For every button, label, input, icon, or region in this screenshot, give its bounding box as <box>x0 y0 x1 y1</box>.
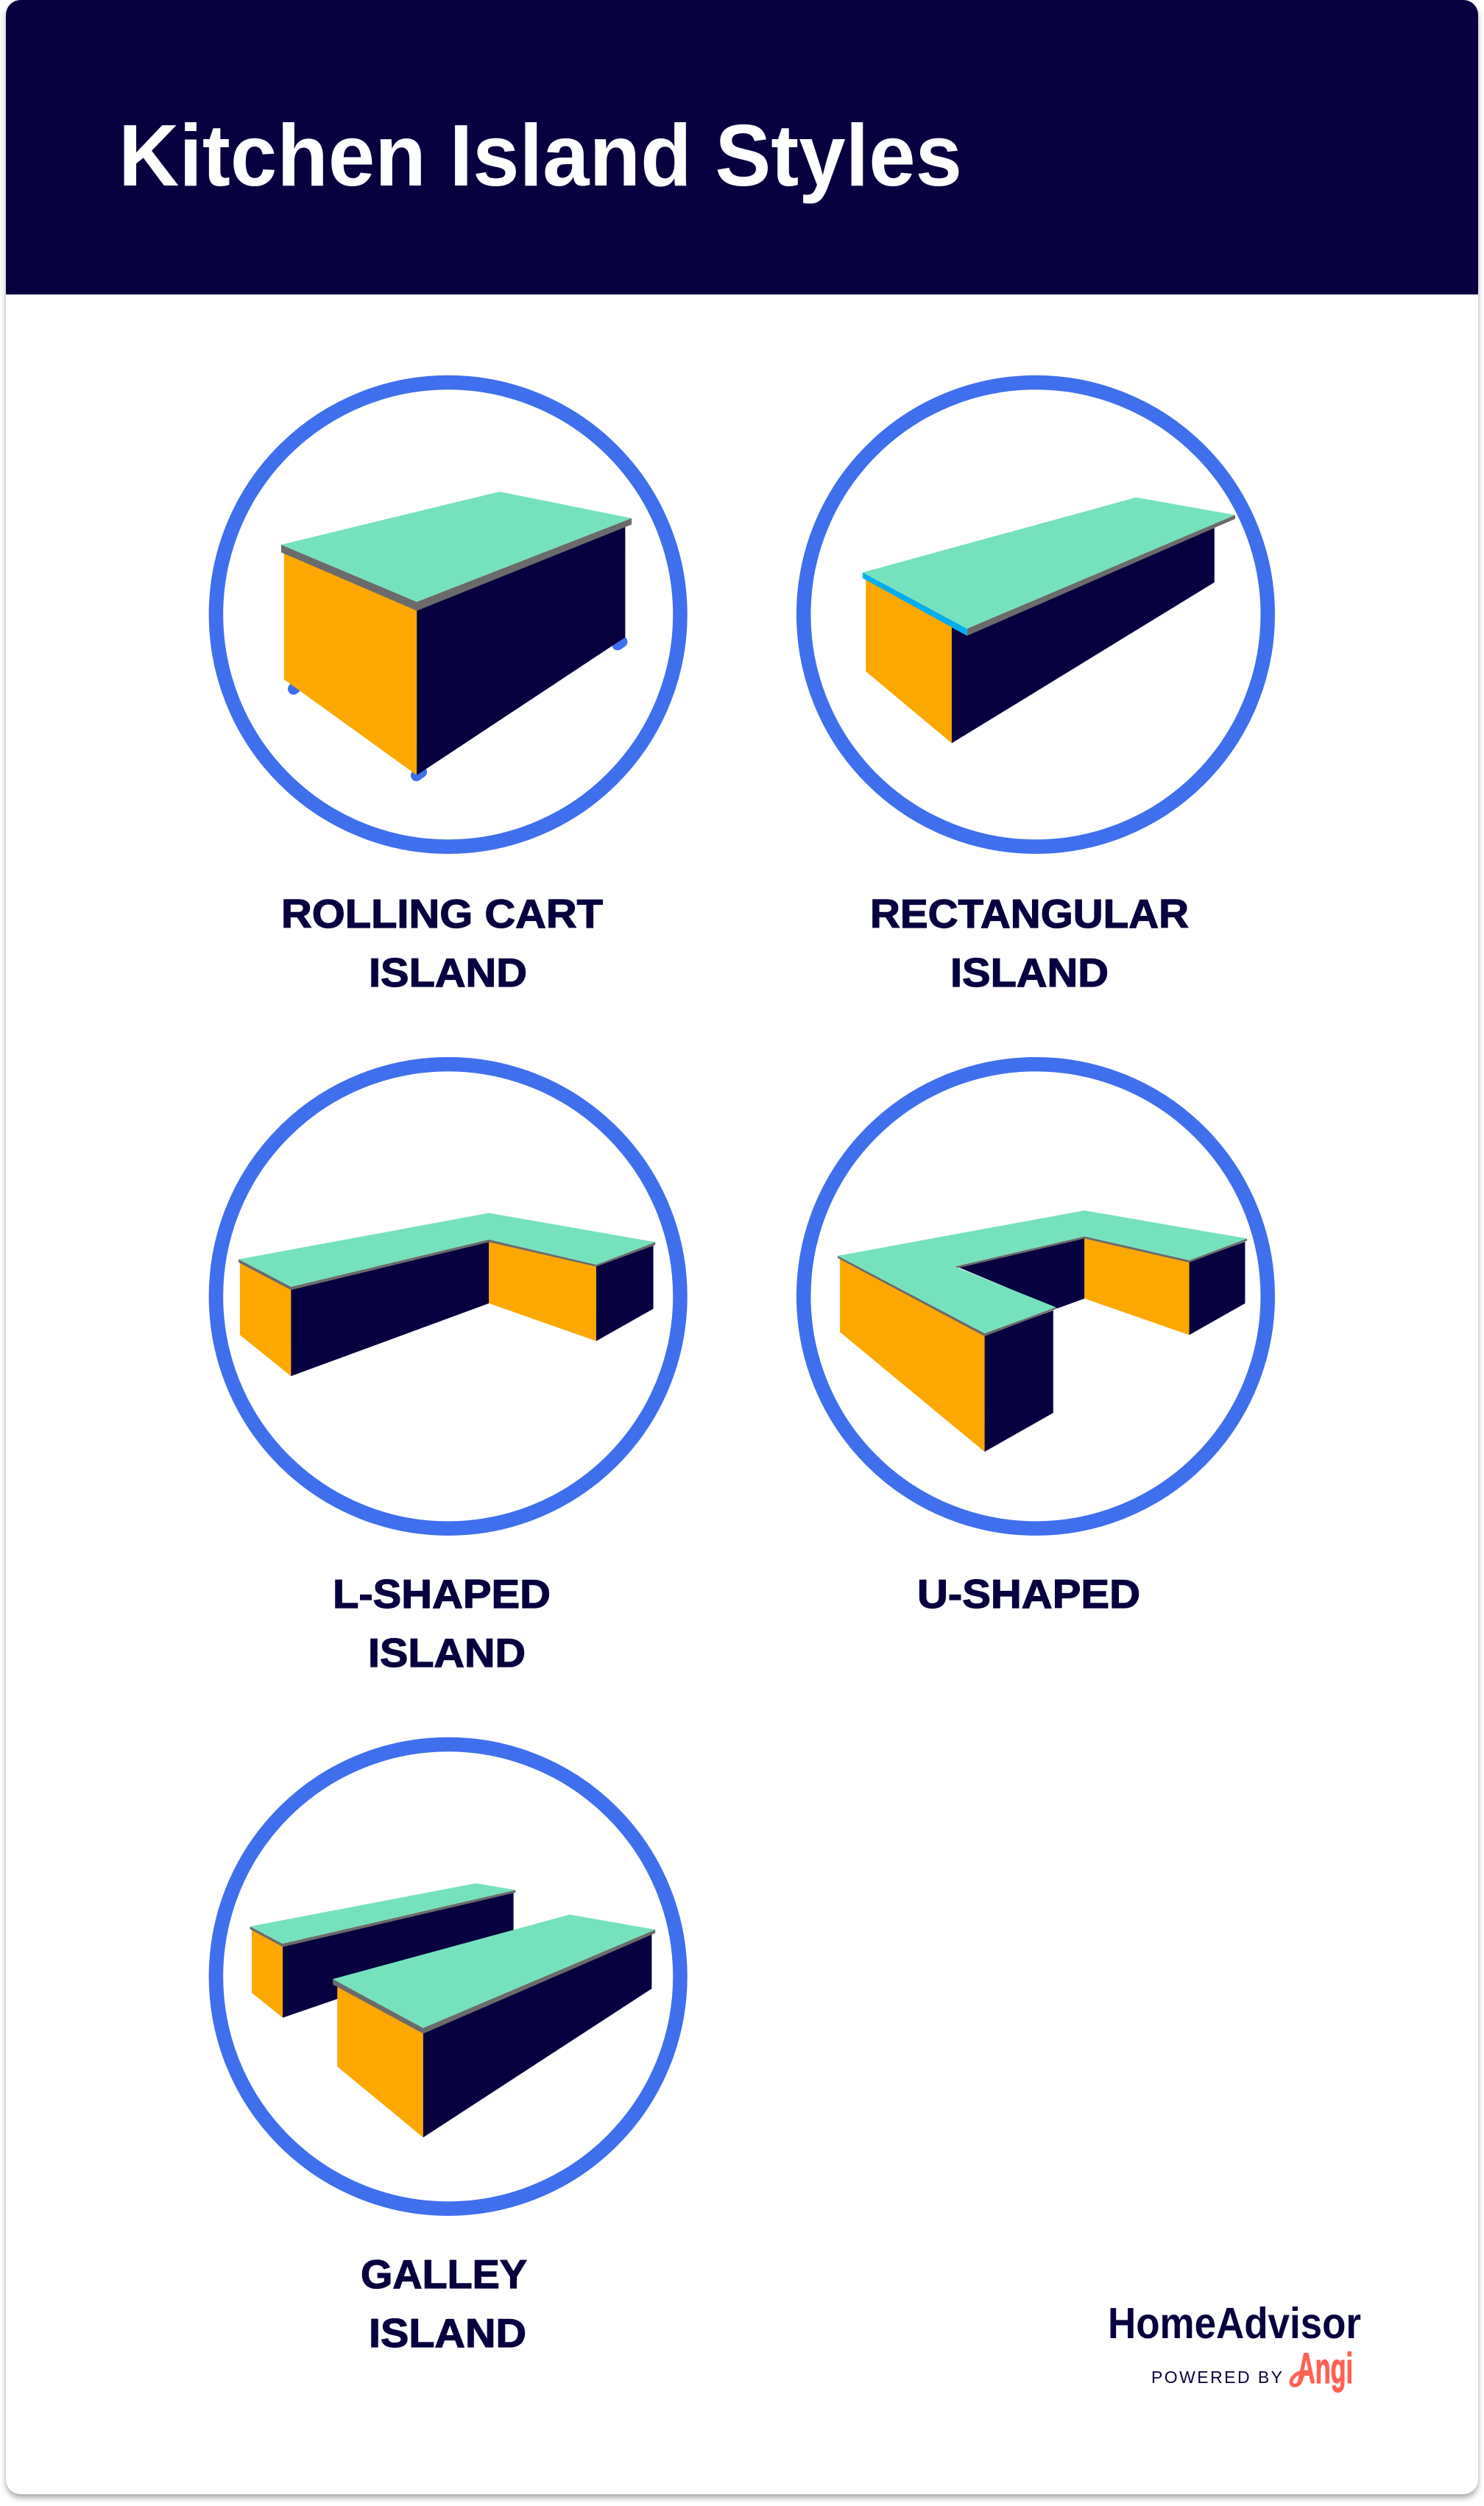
label: rolling cart island: ROLLING CART <box>281 891 603 936</box>
title: Kitchen Island Styles <box>119 107 962 205</box>
label: rectangular island: RECTANGULAR <box>870 891 1189 936</box>
logo: HomeAdvisor powered by Angi: Angi <box>1297 2345 1353 2393</box>
label: rectangular island: ISLAND <box>950 950 1109 995</box>
panel: rectangular island <box>804 383 1268 995</box>
panel: u-shaped island <box>804 1065 1268 1617</box>
icon: rolling cart island <box>216 383 680 847</box>
label: l-shaped island: L-SHAPED <box>333 1571 551 1617</box>
label: galley island: GALLEY <box>361 2251 527 2297</box>
header band <box>6 0 1478 294</box>
icon: u-shaped island <box>804 1065 1268 1528</box>
icon: l-shaped island <box>216 1065 680 1528</box>
label: rectangular island <box>870 891 1189 995</box>
panel: l-shaped island <box>216 1065 680 1676</box>
logo: HomeAdvisor powered by Angi <box>1108 2299 1361 2393</box>
panel: galley island <box>216 1745 680 2356</box>
icon: rectangular island <box>804 383 1268 847</box>
panel: rolling cart island <box>216 383 680 995</box>
icon: galley island <box>216 1745 680 2209</box>
label: u-shaped: U-SHAPED <box>917 1571 1140 1617</box>
label: l-shaped island <box>333 1571 551 1676</box>
label: rolling cart island: ISLAND <box>369 950 527 995</box>
label: galley island: ISLAND <box>369 2310 526 2356</box>
label: rolling cart island <box>281 891 603 995</box>
logo: HomeAdvisor powered by Angi: POWERED BY <box>1151 2368 1282 2387</box>
logo: HomeAdvisor powered by Angi: HomeAdvisor <box>1108 2299 1361 2348</box>
label: l-shaped island: ISLAND <box>368 1630 526 1676</box>
label: galley island <box>361 2251 527 2356</box>
